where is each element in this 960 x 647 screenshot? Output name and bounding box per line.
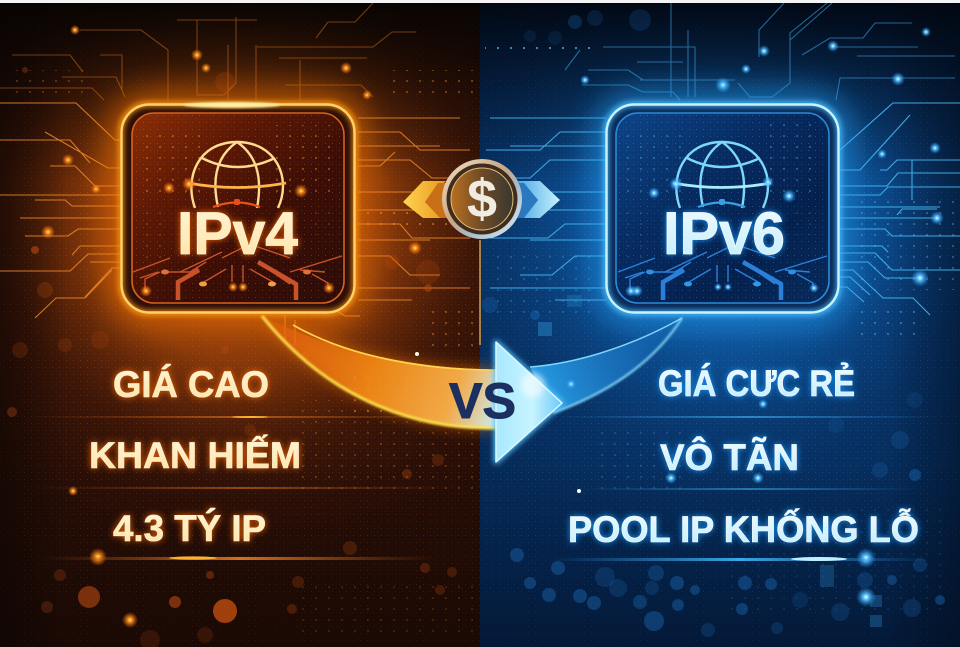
circuit traces: IPv4 top xyxy=(0,3,416,100)
divider lines: IPv6 xyxy=(550,416,940,561)
arrow head xyxy=(496,342,562,462)
card body xyxy=(121,104,355,313)
card outer border xyxy=(121,104,355,313)
dot clusters: IPv6 xyxy=(485,47,955,610)
text: scarce: KHAN HIẾM xyxy=(89,435,301,476)
light spots: IPv4 xyxy=(41,25,422,628)
chip circuit: IPv4 xyxy=(133,246,342,300)
swoosh: orange body xyxy=(262,316,496,428)
panel: IPv6 background xyxy=(480,3,960,647)
center split glow xyxy=(479,240,481,345)
list: IPv6 traits xyxy=(568,363,919,550)
list: IPv4 traits xyxy=(89,364,301,549)
coin face xyxy=(451,168,513,230)
square tiles: IPv6 xyxy=(538,295,882,627)
card body xyxy=(606,104,839,313)
dot clusters: IPv4 xyxy=(10,70,475,641)
data dots xyxy=(620,130,685,200)
card inner panel xyxy=(616,113,829,303)
top white strip xyxy=(0,0,960,3)
coin ring xyxy=(442,159,522,239)
globe icon: IPv4 xyxy=(188,142,286,208)
panel: IPv4 background xyxy=(0,3,480,647)
circuit traces: IPv4 side xyxy=(0,103,478,345)
label: IPv6: IPv6 xyxy=(663,200,785,267)
circuit traces: IPv6 side xyxy=(482,103,960,315)
card glow xyxy=(606,104,839,313)
VS label: VS xyxy=(449,373,516,429)
card: IPv4 xyxy=(121,102,355,313)
swoosh: blue tail xyxy=(530,318,682,413)
text: very cheap: GIÁ CƯC RẺ xyxy=(658,363,855,404)
chevrons: left xyxy=(403,181,452,218)
icon: dollar coin with arrows xyxy=(403,159,560,239)
globe icon: IPv6 xyxy=(673,142,771,208)
label: IPv4: IPv4 xyxy=(177,200,299,267)
bokeh: IPv6 xyxy=(482,9,945,637)
top flare xyxy=(184,102,280,108)
card outer border xyxy=(606,104,839,313)
text: huge IP pool: POOL IP KHỐNG LỖ xyxy=(568,508,919,550)
chip circuit: IPv6 xyxy=(618,246,827,300)
card inner panel xyxy=(132,113,344,303)
card glow xyxy=(121,104,355,313)
text: 4.3 billion IPs: 4.3 TÝ IP xyxy=(113,508,266,549)
swoosh dot texture xyxy=(350,375,460,420)
dollar sign: $ xyxy=(467,169,497,229)
arrow: curved IPv4 to IPv6 xyxy=(262,316,682,462)
light spots: IPv6 xyxy=(577,27,944,607)
card: IPv6 xyxy=(606,104,839,313)
bokeh: IPv4 xyxy=(7,67,457,647)
chevrons: right xyxy=(512,181,560,218)
text: high price: GIÁ CAO xyxy=(113,364,269,405)
text: endless: VÔ TÃN xyxy=(660,436,799,478)
divider lines: IPv4 xyxy=(30,416,460,560)
glints xyxy=(669,177,683,191)
data dots xyxy=(135,130,200,200)
circuit traces: IPv6 top xyxy=(565,3,955,100)
coin dark band xyxy=(446,164,518,234)
glints xyxy=(182,177,196,191)
